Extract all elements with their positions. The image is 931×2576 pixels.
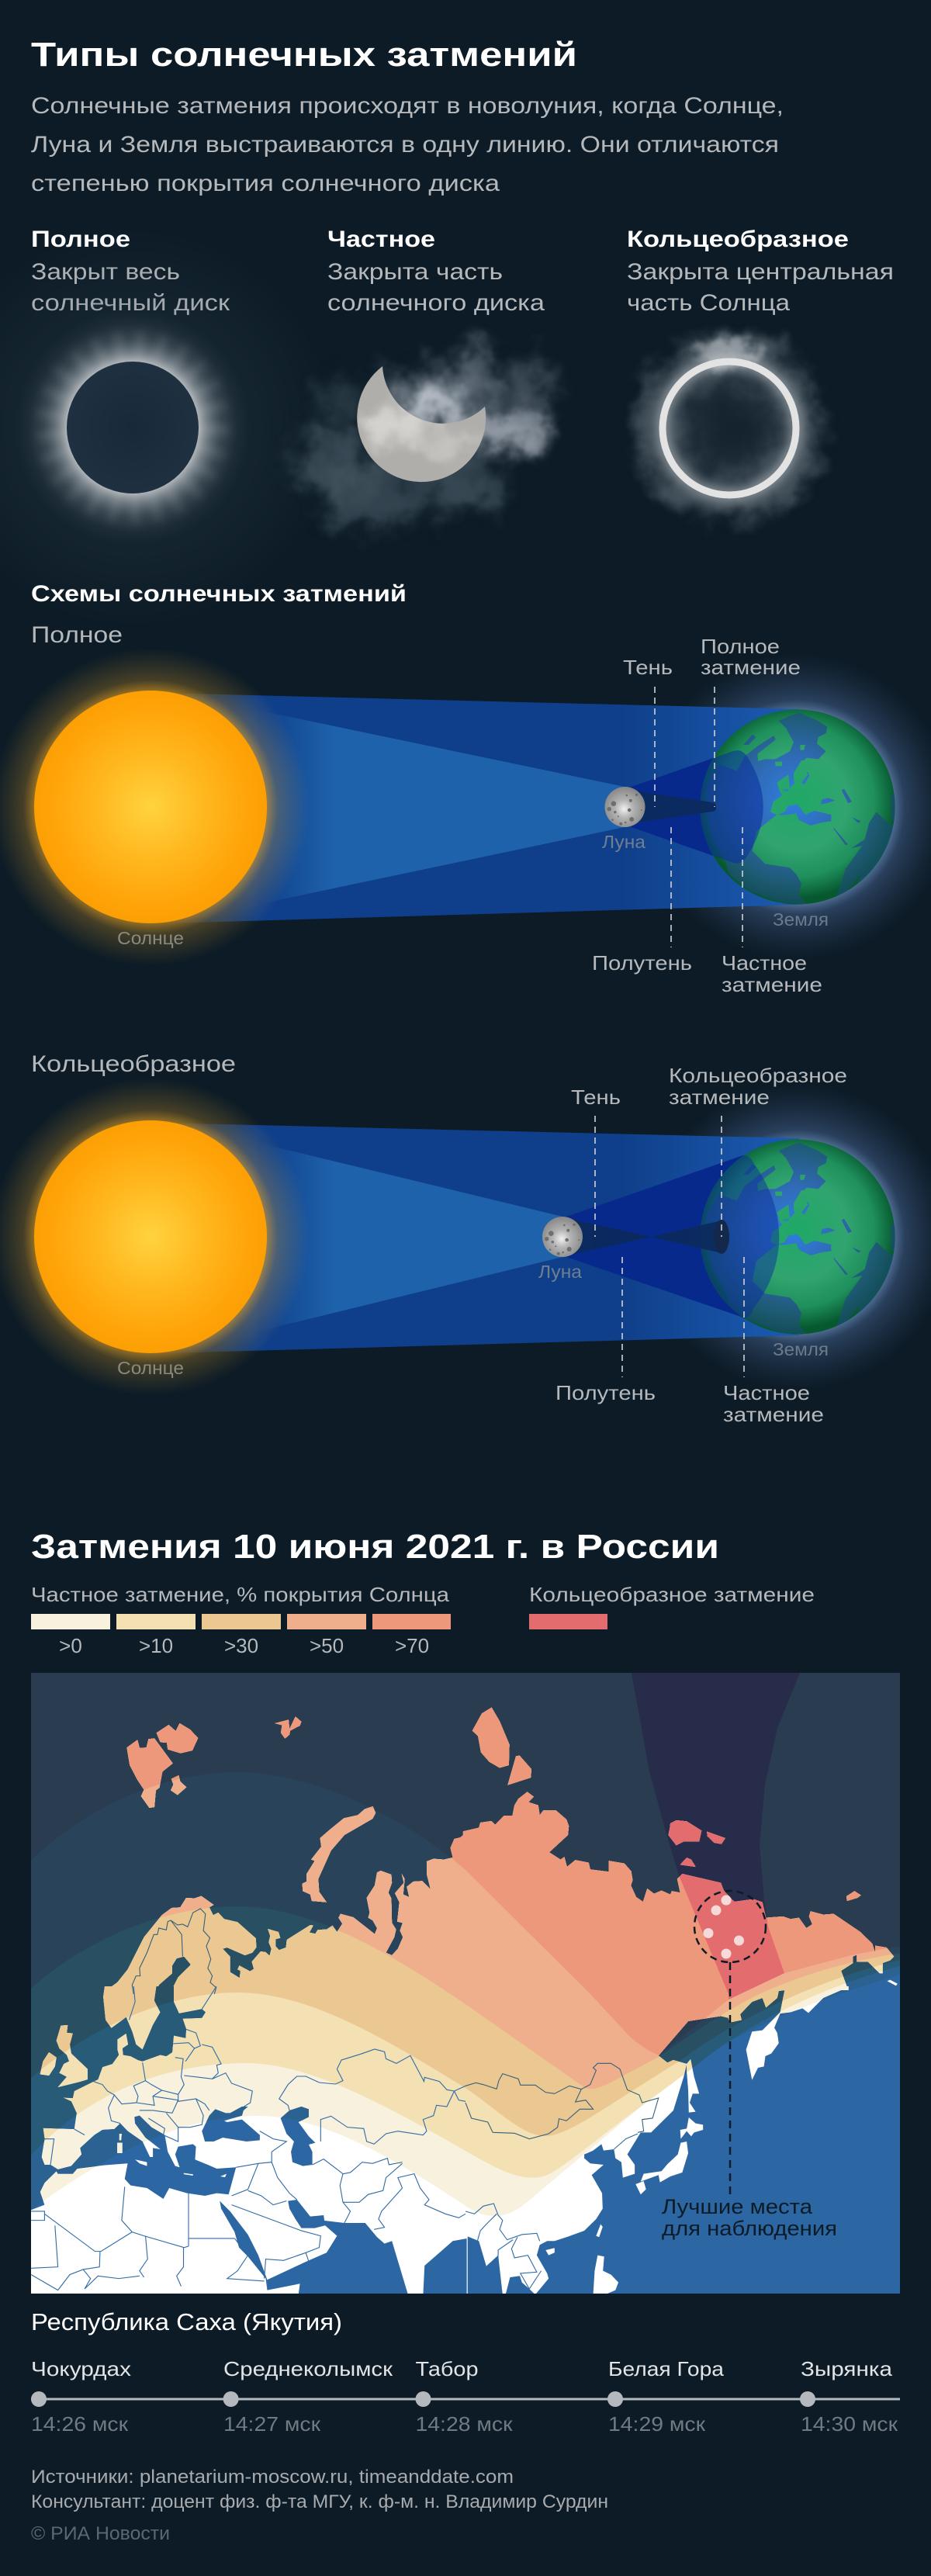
label: sun: Солнце	[117, 928, 184, 948]
label: umbra: Тень	[623, 656, 673, 679]
umbra	[627, 790, 716, 824]
label: umbra: Тень	[571, 1085, 621, 1109]
stop: Chokurdakh: Чокурдах	[31, 2357, 131, 2380]
annular spot	[714, 1220, 729, 1254]
stop: Tabor	[416, 2357, 513, 2436]
column: total eclipse text: Полное	[31, 227, 130, 252]
callout: best places	[662, 2199, 836, 2239]
stop: Srednekolymsk: 14:27 мск	[223, 2412, 321, 2436]
earth glow	[644, 1083, 931, 1390]
land coloured by eclipse coverage, with borders	[31, 1673, 900, 2294]
earth	[700, 709, 897, 905]
label: partial eclipse: затмение	[723, 1403, 824, 1426]
stop: Zyryanka	[800, 2357, 898, 2436]
column: annular eclipse text: Закрыта центральная	[627, 259, 894, 285]
label: total eclipse: затмение	[701, 656, 801, 679]
column: total eclipse text: солнечный диск	[31, 290, 230, 316]
legend: partial eclipse coverage: >10	[139, 1634, 173, 1657]
column: annular eclipse text	[627, 227, 894, 316]
lens of partial eclipse on earth	[700, 750, 763, 864]
intro paragraph: Луна и Земля выстраиваются в одну линию. Они отличаются	[31, 132, 779, 158]
shadow cone	[627, 750, 763, 864]
map of the eclipse	[31, 1673, 900, 2295]
seas repainted over land	[31, 1986, 315, 2210]
penumbra beam	[159, 693, 799, 923]
moon	[605, 787, 645, 827]
label: penumbra: Полутень	[592, 951, 692, 975]
legend: partial eclipse coverage: >0	[59, 1634, 82, 1657]
label: partial eclipse: затмение	[722, 973, 822, 996]
column: annular eclipse text: Кольцеобразное	[627, 227, 849, 252]
column: partial eclipse text	[327, 227, 545, 316]
legend: partial eclipse coverage: >70	[395, 1634, 429, 1657]
sun	[0, 648, 310, 966]
stop: Tabor: Табор	[416, 2357, 478, 2380]
lens of partial eclipse on earth	[701, 1155, 779, 1317]
icon: annular eclipse	[628, 327, 830, 529]
legend: annular eclipse	[529, 1583, 815, 1629]
stop: Srednekolymsk: Среднеколымск	[223, 2357, 393, 2380]
diagram: annular eclipse	[0, 1064, 931, 1426]
callout: best places: для наблюдения	[662, 2217, 837, 2240]
label: moon: Луна	[602, 832, 645, 852]
diagram: total eclipse	[0, 635, 931, 996]
stop: Zyryanka: 14:30 мск	[801, 2412, 898, 2436]
label: total eclipse: Полное	[701, 635, 780, 658]
stop: Srednekolymsk	[223, 2357, 393, 2436]
stop: Chokurdakh	[31, 2357, 131, 2436]
islands	[40, 2025, 227, 2177]
label: earth: Земля	[773, 909, 829, 930]
intro paragraph: Солнечные затмения происходят в новолуния, когда Солнце,	[31, 93, 784, 119]
intro paragraph	[31, 93, 784, 196]
subheading: total: Полное	[31, 622, 123, 648]
earth	[700, 1139, 897, 1335]
stop: Tabor: 14:28 мск	[416, 2412, 513, 2436]
title: Типы солнечных затмений	[31, 36, 577, 74]
label: penumbra: Полутень	[555, 1381, 656, 1404]
stop: Belaya Gora: 14:29 мск	[608, 2412, 706, 2436]
stop: Chokurdakh: 14:26 мск	[31, 2412, 129, 2436]
column: total eclipse text: Закрыт весь	[31, 259, 180, 285]
legend: partial eclipse coverage: >50	[310, 1634, 344, 1657]
subheading: annular: Кольцеобразное	[31, 1051, 236, 1077]
penumbra beam	[159, 1123, 799, 1353]
label: partial eclipse: Частное	[722, 951, 807, 975]
stop: Zyryanka: Зырянка	[801, 2357, 893, 2380]
southern seas: Red Sea, Arabian Sea, Persian Gulf, Bay of Bengal	[220, 2200, 467, 2295]
column: annular eclipse text: часть Солнца	[627, 290, 790, 316]
sources	[31, 2467, 608, 2512]
column: partial eclipse text: солнечного диска	[327, 290, 545, 316]
column: partial eclipse text: Частное	[327, 227, 435, 252]
legend: annular eclipse: Кольцеобразное затмение	[529, 1583, 815, 1606]
label: sun: Солнце	[117, 1358, 184, 1378]
shadow cone	[564, 1155, 779, 1317]
label: annular eclipse	[669, 1064, 847, 1109]
label: annular eclipse: затмение	[669, 1085, 770, 1109]
label: partial eclipse: Частное	[723, 1381, 810, 1404]
icon: total eclipse corona	[0, 226, 334, 629]
timeline	[31, 2357, 900, 2436]
label: partial eclipse	[723, 1381, 824, 1426]
heading: Sakha Republic: Республика Саха (Якутия)	[31, 2308, 342, 2335]
label: partial eclipse	[722, 951, 822, 996]
copyright: © РИА Новости	[31, 2523, 170, 2544]
legend: partial eclipse coverage	[31, 1583, 451, 1657]
label: moon: Луна	[538, 1262, 582, 1282]
dashed leaders	[655, 687, 742, 947]
umbra crossing	[564, 1217, 722, 1256]
heading: eclipse diagrams: Схемы солнечных затмений	[31, 581, 407, 607]
label: total eclipse	[701, 635, 801, 679]
stop: Belaya Gora	[607, 2357, 725, 2436]
label: annular eclipse: Кольцеобразное	[669, 1064, 847, 1087]
sunlight cone to moon	[178, 1124, 562, 1351]
map title: Затмения 10 июня 2021 г. в России	[31, 1528, 719, 1566]
sea zones	[31, 1673, 900, 2294]
callout: best places: Лучшие места	[662, 2195, 813, 2218]
label: earth: Земля	[773, 1339, 829, 1359]
sources: Консультант: доцент физ. ф-та МГУ, к. ф-м. н. Владимир Сурдин	[31, 2491, 608, 2512]
sunlight cone to moon	[178, 694, 625, 921]
column: partial eclipse text: Закрыта часть	[327, 259, 503, 285]
sun	[0, 1078, 310, 1396]
stop: Belaya Gora: Белая Гора	[608, 2357, 725, 2380]
moon	[542, 1217, 583, 1257]
sources: Источники: planetarium-moscow.ru, timeanddate.com	[31, 2467, 514, 2488]
legend: partial eclipse coverage: Частное затмение, % покрытия Солнца	[31, 1583, 450, 1606]
leader line to callout	[729, 1962, 731, 2195]
icon: partial eclipse	[292, 347, 553, 528]
best viewing places circle	[694, 1891, 766, 1962]
column: total eclipse text	[31, 227, 230, 316]
dashed leaders	[595, 1116, 744, 1377]
earth glow	[644, 653, 931, 961]
intro paragraph: степенью покрытия солнечного диска	[31, 171, 500, 196]
legend: partial eclipse coverage: >30	[224, 1634, 258, 1657]
